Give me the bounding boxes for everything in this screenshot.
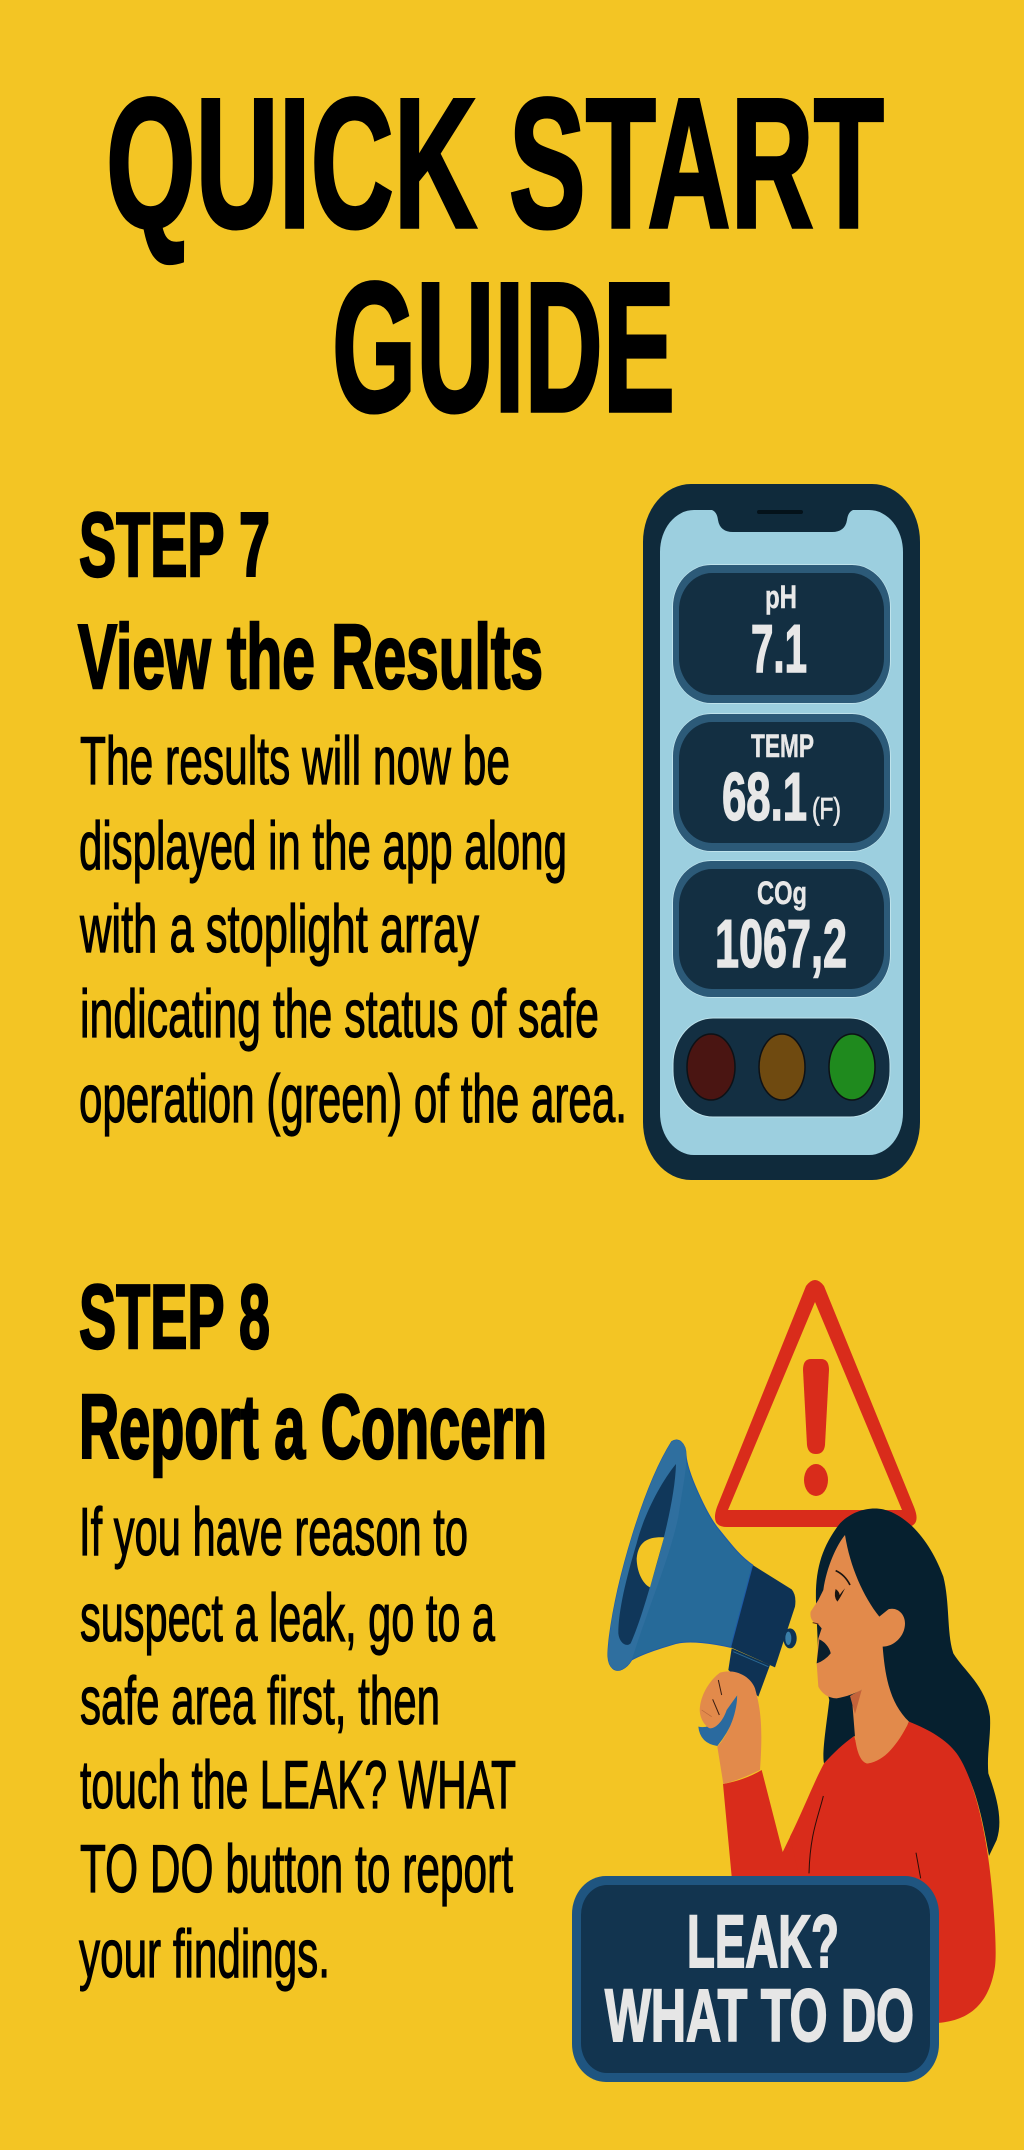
- panel: pH reading: 7.1: [751, 611, 807, 687]
- panel: stoplight array: [673, 1018, 890, 1117]
- step 8 body text: [79, 1494, 516, 1992]
- face: [810, 1535, 905, 1698]
- panel: CO2 reading: 1067,2: [715, 906, 847, 982]
- illustration: woman with megaphone and warning sign: [608, 1280, 999, 2023]
- step 7 number heading: STEP 7: [79, 495, 270, 596]
- title: [106, 61, 884, 451]
- megaphone grip and fist: [698, 1671, 761, 1784]
- step 7 body text: indicating the status of safe: [80, 976, 599, 1052]
- eye and brow: [813, 1571, 850, 1624]
- hair: [816, 1508, 999, 1856]
- icon: megaphone: [608, 1440, 797, 1697]
- panel: temperature reading: [672, 713, 891, 852]
- mouth: [817, 1639, 831, 1663]
- step 8 body text: your findings.: [79, 1916, 330, 1992]
- neck: [852, 1647, 909, 1763]
- panel: temperature reading: 68.1: [722, 759, 807, 835]
- panel: CO2 reading: COg: [757, 875, 807, 911]
- illustration: woman: [790, 1508, 999, 2023]
- step 7 body text: [79, 723, 627, 1137]
- step 8 body text: safe area first, then: [80, 1663, 440, 1739]
- step 7 body text: with a stoplight array: [79, 891, 479, 967]
- step 7 body text: The results will now be: [80, 723, 510, 799]
- red sweater: [790, 1722, 996, 2023]
- step 8 body text: If you have reason to: [79, 1494, 468, 1570]
- step 7 body text: operation (green) of the area.: [79, 1061, 627, 1137]
- hand and sleeve: [698, 1671, 800, 1880]
- step 8 body text: suspect a leak, go to a: [80, 1580, 495, 1656]
- step 8 number heading: STEP 8: [79, 1267, 270, 1368]
- icon: phone with readings: [643, 484, 920, 1180]
- icon: red light: [687, 1034, 735, 1100]
- panel: CO2 reading: [672, 860, 891, 998]
- step 7 body text: displayed in the app along: [79, 808, 567, 884]
- step 8 body text: touch the LEAK? WHAT: [80, 1747, 516, 1823]
- title: GUIDE: [332, 245, 675, 451]
- panel: pH reading: [672, 564, 891, 704]
- step 8 title heading: Report a Concern: [79, 1377, 547, 1478]
- panel: step 8 text: [79, 1267, 547, 1992]
- button: LEAK? WHAT TO DO: LEAK?: [687, 1900, 839, 1983]
- icon: amber light: [759, 1034, 805, 1100]
- icon: warning triangle: [715, 1280, 917, 1527]
- step 8 body text: TO DO button to report: [80, 1831, 513, 1907]
- panel: step 7 text: [78, 495, 627, 1137]
- panel: temperature reading: (F): [812, 791, 841, 826]
- panel: temperature reading: TEMP: [751, 728, 814, 764]
- button: LEAK? WHAT TO DO: [572, 1876, 939, 2082]
- panel: pH reading: pH: [765, 579, 797, 615]
- icon: green light: [829, 1034, 875, 1100]
- step 7 title heading: View the Results: [78, 607, 543, 708]
